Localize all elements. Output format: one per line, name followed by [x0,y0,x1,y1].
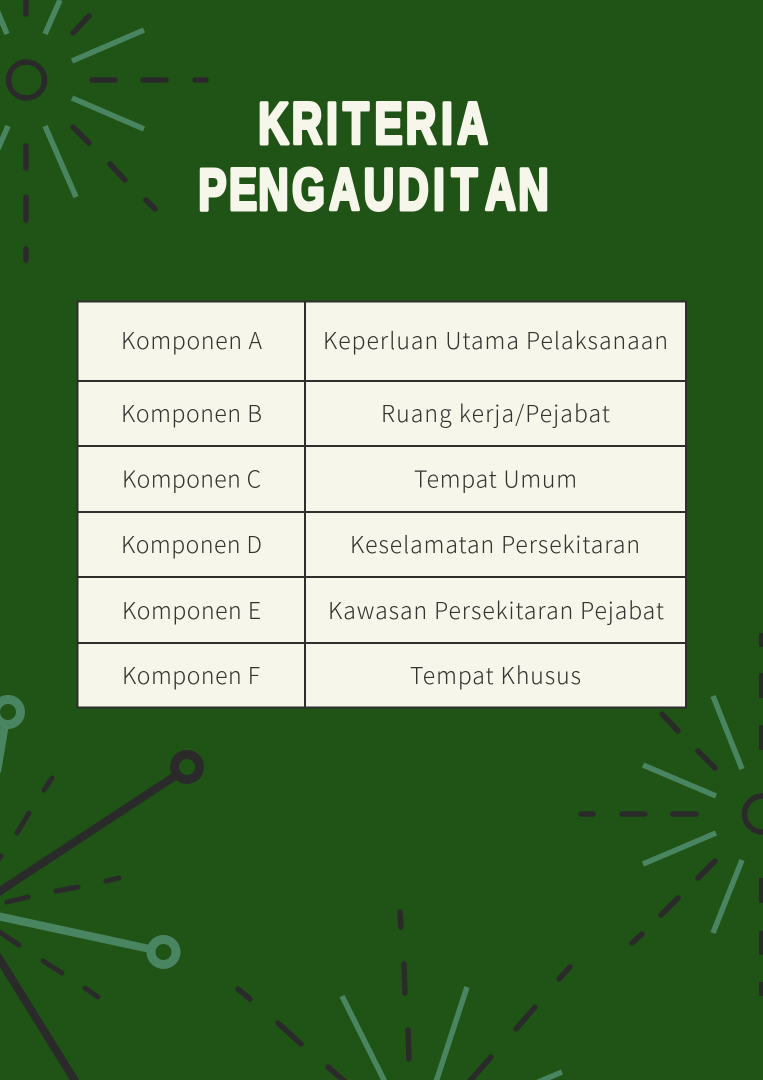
row: Komponen D: Komponen D [121,526,262,560]
row: Komponen E: Kawasan Persekitaran Pejabat [328,592,664,626]
title: KRITERIA [258,91,488,156]
decoration: bottom-centre starburst [238,912,570,1080]
row: Komponen D: Keselamatan Persekitaran [350,526,640,560]
title [198,91,549,222]
row: Komponen C [122,460,577,494]
decoration: bottom-left burst with ringed lines [0,700,200,1080]
table background and grid [78,302,686,708]
row: Komponen C: Komponen C [122,460,261,494]
row: Komponen E [122,592,664,626]
row: Komponen C: Tempat Umum [414,460,577,494]
table [78,302,686,708]
decoration: right starburst [581,633,763,996]
row: Komponen A: Keperluan Utama Pelaksanaan [323,322,668,356]
row: Komponen B [121,395,610,429]
row: Komponen A [121,322,668,356]
decoration: top-left starburst [0,0,206,260]
row: Komponen F: Komponen F [122,657,260,691]
row: Komponen F [122,657,581,691]
title: PENGAUDITAN [198,157,549,222]
row: Komponen E: Komponen E [122,592,261,626]
row: Komponen F: Tempat Khusus [410,657,581,691]
row: Komponen B: Komponen B [121,395,262,429]
row: Komponen D [121,526,640,560]
row: Komponen B: Ruang kerja/Pejabat [381,395,610,429]
row: Komponen A: Komponen A [121,322,262,356]
